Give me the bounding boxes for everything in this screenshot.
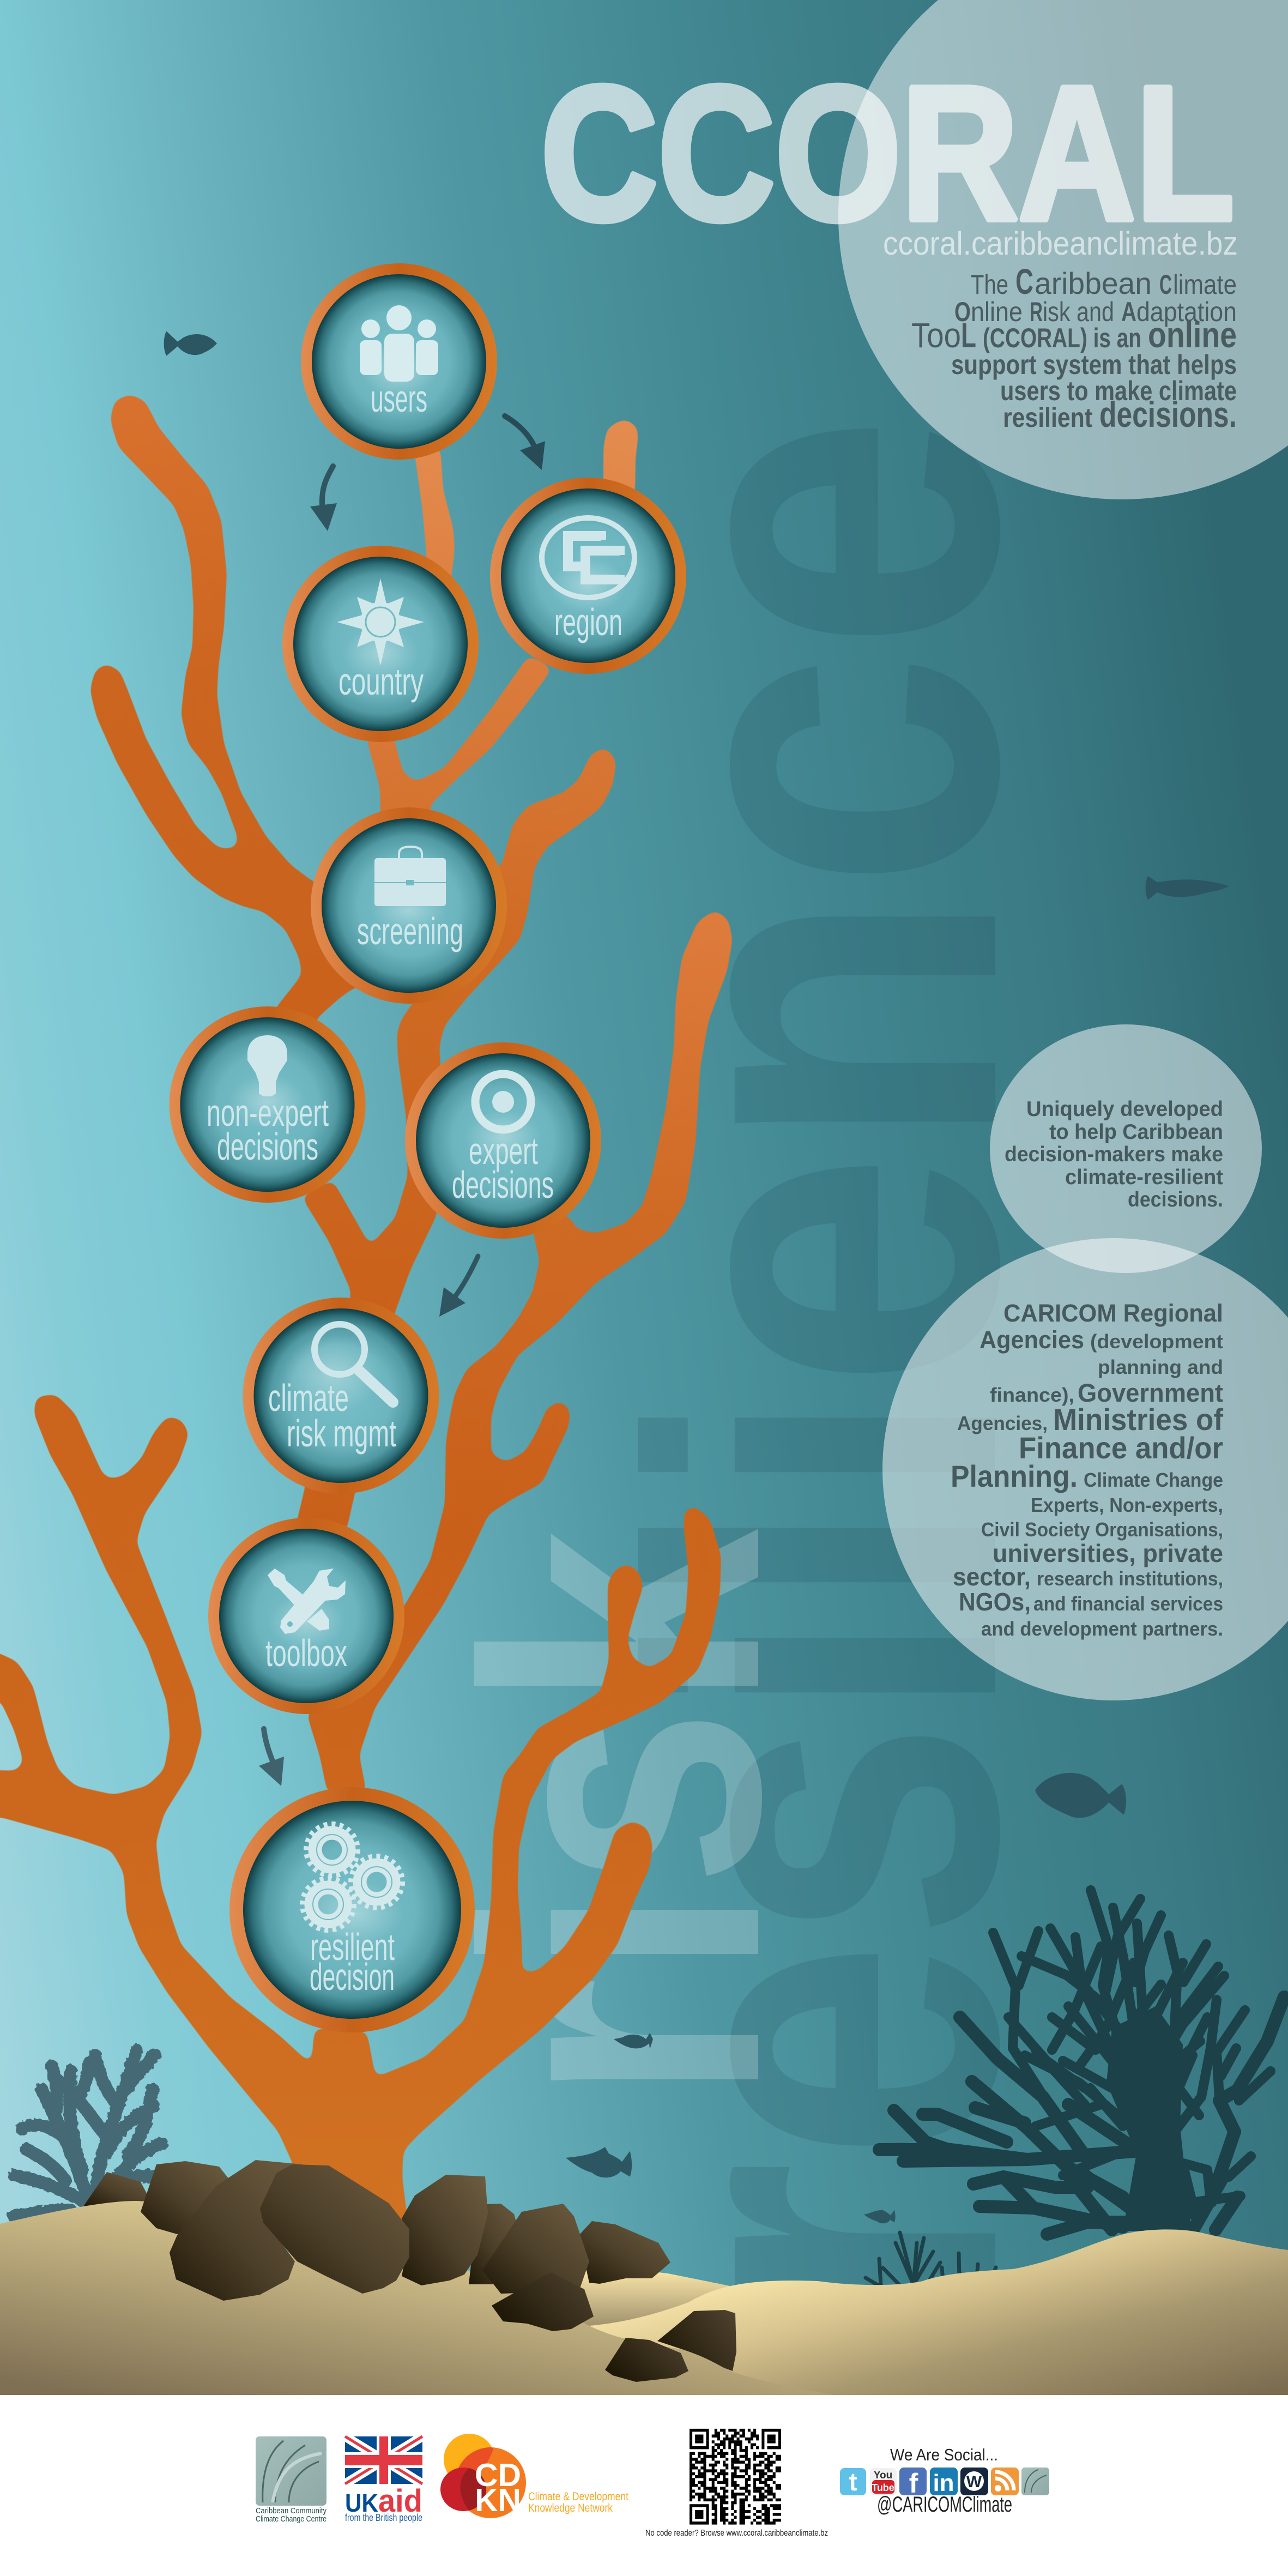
coral: region tip bbox=[603, 419, 638, 496]
text: target audience: sector, bbox=[953, 1563, 1031, 1591]
text: target audience: CARICOM Regional bbox=[1003, 1299, 1223, 1327]
translucent circle: uniquely developed bbox=[990, 1024, 1262, 1273]
fish small bottom right bbox=[864, 2210, 896, 2223]
icon: target bbox=[475, 1074, 531, 1130]
text: target audience: Agencies, bbox=[957, 1412, 1048, 1434]
icon: facebook: f bbox=[909, 2468, 918, 2499]
icon: facebook bbox=[899, 2468, 927, 2499]
medallion: climate risk mgmt bbox=[243, 1298, 439, 1494]
website url: ccoral.caribbeanclimate.bz bbox=[883, 225, 1238, 262]
label: expert decisions bbox=[452, 1130, 554, 1206]
seaweed: feathery tree left bbox=[14, 2050, 166, 2230]
logo: CDKN: Climate & Development bbox=[528, 2490, 628, 2503]
text: target audience: (development bbox=[1090, 1330, 1223, 1353]
watermark word: resilience bbox=[549, 414, 1100, 2315]
text: target audience: universities, private bbox=[993, 1539, 1223, 1567]
fish silhouettes bbox=[164, 331, 1229, 2223]
icon: twitter: t bbox=[849, 2468, 857, 2496]
translucent circle: audience bbox=[882, 1238, 1288, 1700]
watermark word: resilience: resili bbox=[549, 1390, 1100, 2315]
logo: UK aid bbox=[345, 2436, 422, 2523]
fish small centre bbox=[614, 2033, 653, 2049]
intro text block: R bbox=[1030, 297, 1043, 327]
text: target audience: NGOs, bbox=[959, 1588, 1031, 1616]
text: uniquely developed: climate-resilient bbox=[1065, 1166, 1223, 1189]
sand: left dune bbox=[0, 2201, 834, 2395]
text: target audience: Finance and/or bbox=[1019, 1431, 1223, 1465]
intro text block: L bbox=[961, 316, 976, 355]
text: uniquely developed bbox=[1005, 1097, 1223, 1211]
medallion: toolbox bbox=[208, 1518, 404, 1714]
social handle: @CARICOMClimate bbox=[877, 2493, 1012, 2517]
label: expert decisions: expert bbox=[469, 1130, 538, 1172]
label: screening: screening bbox=[357, 910, 463, 952]
arrow: toolbox to resilient bbox=[259, 1729, 284, 1786]
label: climate risk mgmt: climate bbox=[268, 1377, 349, 1419]
label: non-expert decisions: decisions bbox=[217, 1125, 318, 1168]
intro text block: A bbox=[1121, 297, 1136, 327]
medallion: region bbox=[490, 478, 686, 674]
watermark word: risk: risk bbox=[403, 1527, 842, 2102]
icon: compass star bbox=[337, 578, 424, 666]
intro text block: isk and bbox=[1043, 297, 1114, 327]
label: climate risk mgmt bbox=[268, 1377, 396, 1455]
translucent circle: top right intro bbox=[838, 0, 1288, 499]
arrow: users to region bbox=[505, 416, 545, 470]
rocks pile bbox=[141, 2160, 688, 2382]
sand: back dune bbox=[458, 2267, 774, 2363]
icon: gears bbox=[303, 1824, 402, 1930]
text: target audience: Experts, Non-experts, bbox=[1031, 1494, 1223, 1516]
label: toolbox: toolbox bbox=[265, 1632, 347, 1674]
text: uniquely developed: to help Caribbean bbox=[1049, 1120, 1223, 1144]
logo: CDKN: KN bbox=[475, 2482, 521, 2518]
logo: CDKN: Knowledge Network bbox=[528, 2502, 613, 2514]
medallion: country bbox=[282, 546, 479, 742]
icon: wrench and screwdriver bbox=[268, 1568, 346, 1634]
icon: wordpress: W bbox=[966, 2473, 982, 2491]
medallion: users bbox=[301, 263, 497, 460]
social heading: We Are Social... bbox=[890, 2445, 998, 2464]
coral: lower limbs and trunk base bbox=[0, 1394, 721, 2273]
intro text block: O bbox=[954, 297, 971, 327]
label: region: region bbox=[554, 601, 622, 643]
medallion: screening bbox=[311, 807, 507, 1004]
logo: CDKN: CD bbox=[475, 2457, 521, 2493]
intro text block: The bbox=[971, 269, 1008, 300]
intro text block: C bbox=[1015, 261, 1033, 301]
label: country: country bbox=[338, 660, 424, 703]
sand: right dune bbox=[589, 2229, 1288, 2395]
label: users: users bbox=[371, 377, 427, 420]
label: expert decisions: decisions bbox=[452, 1163, 554, 1206]
icon: magnifier bbox=[315, 1324, 393, 1402]
fish right middle bbox=[1146, 876, 1229, 900]
logo: CDKN bbox=[440, 2434, 628, 2518]
icon: wordpress bbox=[960, 2468, 988, 2495]
text: target audience: Ministries of bbox=[1053, 1402, 1223, 1437]
social icons bbox=[840, 2468, 1049, 2499]
icon: twitter bbox=[840, 2468, 866, 2496]
text: uniquely developed: decisions. bbox=[1128, 1188, 1223, 1211]
medallion: non-expert decisions bbox=[169, 1006, 365, 1203]
text: target audience: Government bbox=[1078, 1378, 1223, 1407]
label: non-expert decisions: non-expert bbox=[207, 1091, 329, 1134]
arrow: users to country bbox=[310, 466, 337, 531]
text: target audience: Climate Change bbox=[1084, 1469, 1223, 1491]
logo: UK aid: aid bbox=[378, 2483, 422, 2519]
coral: stem users to country bbox=[414, 447, 455, 583]
icon: CC logo bbox=[542, 518, 634, 598]
QR code bbox=[690, 2430, 781, 2523]
intro text block: decisions. bbox=[1099, 394, 1237, 435]
intro text block: nline bbox=[971, 297, 1023, 327]
icon: rss bbox=[991, 2468, 1019, 2495]
logo: UK aid: from the British people bbox=[345, 2512, 422, 2523]
icon: youtube bbox=[870, 2468, 897, 2495]
logo: UK aid: UK bbox=[345, 2489, 378, 2517]
intro text block: users to make climate bbox=[1000, 376, 1237, 406]
coral silhouette: dark right bbox=[879, 1890, 1284, 2234]
intro text block: C bbox=[1159, 269, 1172, 300]
text: target audience: Planning. bbox=[951, 1459, 1078, 1493]
footer panel bbox=[0, 2395, 1288, 2576]
intro text block: online bbox=[1148, 315, 1237, 355]
text: target audience: finance), bbox=[990, 1384, 1074, 1406]
icon: briefcase bbox=[374, 847, 446, 906]
intro text block bbox=[911, 261, 1237, 435]
icon: people bbox=[360, 305, 438, 382]
label: resilient decision bbox=[310, 1926, 395, 1998]
watermark word: resilience: ence bbox=[549, 414, 1100, 1390]
label: non-expert decisions bbox=[207, 1091, 329, 1168]
icon: youtube: You bbox=[874, 2470, 892, 2481]
medallion: resilient decision bbox=[229, 1787, 475, 2032]
intro text block: support system that helps bbox=[951, 349, 1237, 380]
medallion: expert decisions bbox=[405, 1042, 601, 1239]
intro text block: aribbean bbox=[1035, 266, 1152, 300]
intro text block: (CCORAL) is an bbox=[983, 323, 1141, 353]
icon: linkedin: in bbox=[933, 2470, 954, 2496]
text: target audience: Agencies bbox=[979, 1326, 1084, 1354]
coral: region to screening bbox=[366, 655, 553, 850]
coral: big right branch bbox=[307, 910, 733, 1794]
fish top left bbox=[164, 331, 217, 356]
text: target audience: Civil Society Organisations, bbox=[981, 1518, 1223, 1541]
intro text block: resilient bbox=[1003, 402, 1092, 433]
intro text block: Too bbox=[911, 316, 961, 355]
icon: youtube: Tube bbox=[872, 2482, 894, 2493]
coral bbox=[0, 394, 733, 2273]
label: climate risk mgmt: risk mgmt bbox=[287, 1412, 396, 1455]
coral: upper left limbs bbox=[90, 394, 382, 1069]
icon: ccccc bbox=[1021, 2468, 1049, 2495]
rock: behind dune right bbox=[657, 2310, 736, 2371]
label: resilient decision: resilient bbox=[310, 1926, 395, 1968]
intro text block: limate bbox=[1173, 269, 1237, 300]
arrow: expert to climate bbox=[439, 1256, 478, 1317]
logo: Caribbean Community Climate Change Centre: Caribbean Community bbox=[256, 2506, 326, 2515]
logo: Caribbean Community Climate Change Centre bbox=[256, 2436, 326, 2524]
small seaweed bottom bbox=[866, 2233, 996, 2285]
text: target audience: planning and bbox=[1098, 1356, 1223, 1378]
logo: Caribbean Community Climate Change Centre: Climate Change Centre bbox=[256, 2514, 326, 2524]
QR caption: No code reader? Browse www.ccoral.caribbeanclimate.bz bbox=[645, 2529, 828, 2538]
text: target audience: and development partners. bbox=[981, 1618, 1223, 1640]
fish lower centre bbox=[566, 2147, 632, 2177]
fish large right bbox=[1035, 1773, 1126, 1818]
icon: light bulb bbox=[247, 1035, 287, 1096]
coral: screening right branch and central trunk bbox=[301, 747, 616, 1363]
text: uniquely developed: decision-makers make bbox=[1005, 1143, 1223, 1166]
coral: stem climate to toolbox bbox=[294, 1472, 360, 1532]
text: target audience bbox=[951, 1299, 1223, 1640]
text: target audience: research institutions, bbox=[1037, 1567, 1223, 1590]
intro text block: daptation bbox=[1136, 297, 1237, 327]
text: target audience: and financial services bbox=[1033, 1592, 1223, 1615]
label: resilient decision: decision bbox=[310, 1956, 395, 1998]
rock: behind dune left bbox=[83, 2172, 152, 2206]
text: uniquely developed: Uniquely developed bbox=[1026, 1097, 1223, 1121]
